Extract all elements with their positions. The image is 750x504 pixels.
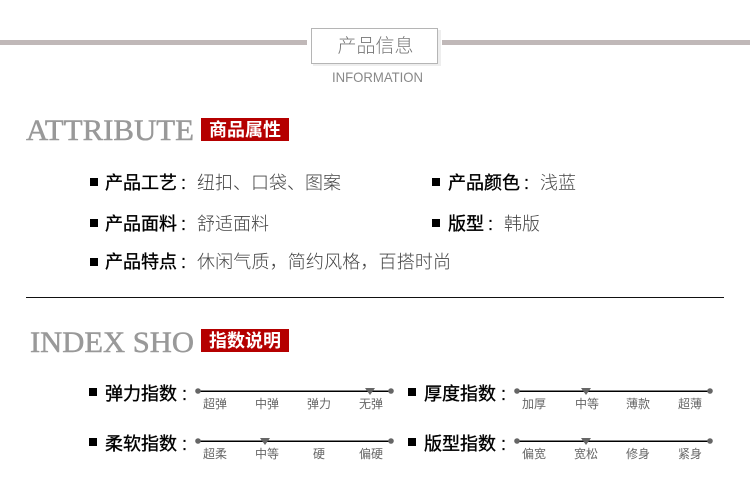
attribute list: 产品工艺: [105, 173, 186, 193]
section heading: attribute: 商品属性 [209, 120, 281, 140]
index: fit: 版型指数 : [424, 434, 506, 454]
index: elasticity: 超弹 [203, 396, 227, 411]
attribute list: 舒适面料 [197, 214, 269, 234]
attribute list: 产品特点: [105, 252, 186, 272]
index: elasticity: 弹力 [307, 397, 331, 411]
header: product information: INFORMATION [332, 69, 423, 85]
index: elasticity: 弹力指数 : [105, 384, 187, 404]
index: thickness: 薄款 [626, 396, 650, 411]
index: thickness: 厚度指数 : [424, 384, 506, 404]
index: elasticity [89, 384, 394, 411]
index: fit: 偏宽 [522, 446, 546, 461]
attribute list: 纽扣、口袋、图案 [197, 173, 341, 193]
section heading: attribute [26, 114, 289, 147]
index: thickness: 加厚 [522, 397, 546, 411]
index: softness: 偏硬 [359, 446, 383, 461]
index: softness: 柔软指数 : [105, 434, 187, 454]
attribute list: 韩版 [504, 214, 540, 234]
attribute list: 产品面料: [105, 214, 186, 234]
index: fit: 宽松 [574, 446, 598, 461]
index: thickness [408, 384, 713, 411]
index: fit: 紧身 [678, 446, 702, 461]
attribute list [90, 173, 576, 272]
section heading: index: INDEX SHO [30, 326, 194, 359]
section heading: attribute: ATTRIBUTE [26, 114, 194, 147]
section heading: index [30, 326, 289, 359]
index: softness: 超柔 [203, 446, 227, 461]
index: elasticity: 中弹 [255, 396, 279, 411]
index: softness: 硬 [313, 447, 325, 461]
index: softness: 中等 [255, 446, 279, 461]
index: fit [408, 434, 713, 461]
header: product information: 产品信息 [337, 35, 414, 57]
index: thickness: 超薄 [678, 396, 702, 411]
attribute list: 产品颜色: [448, 173, 529, 193]
index: softness [89, 434, 394, 461]
attribute list: 休闲气质，简约风格，百搭时尚 [197, 252, 451, 272]
index: fit: 修身 [626, 446, 650, 461]
attribute list: 浅蓝 [540, 173, 576, 193]
header: product information [0, 28, 750, 85]
index: elasticity: 无弹 [359, 397, 383, 411]
section heading: index: 指数说明 [209, 330, 281, 351]
index: thickness: 中等 [575, 396, 599, 411]
attribute list: 版型: [448, 214, 493, 234]
